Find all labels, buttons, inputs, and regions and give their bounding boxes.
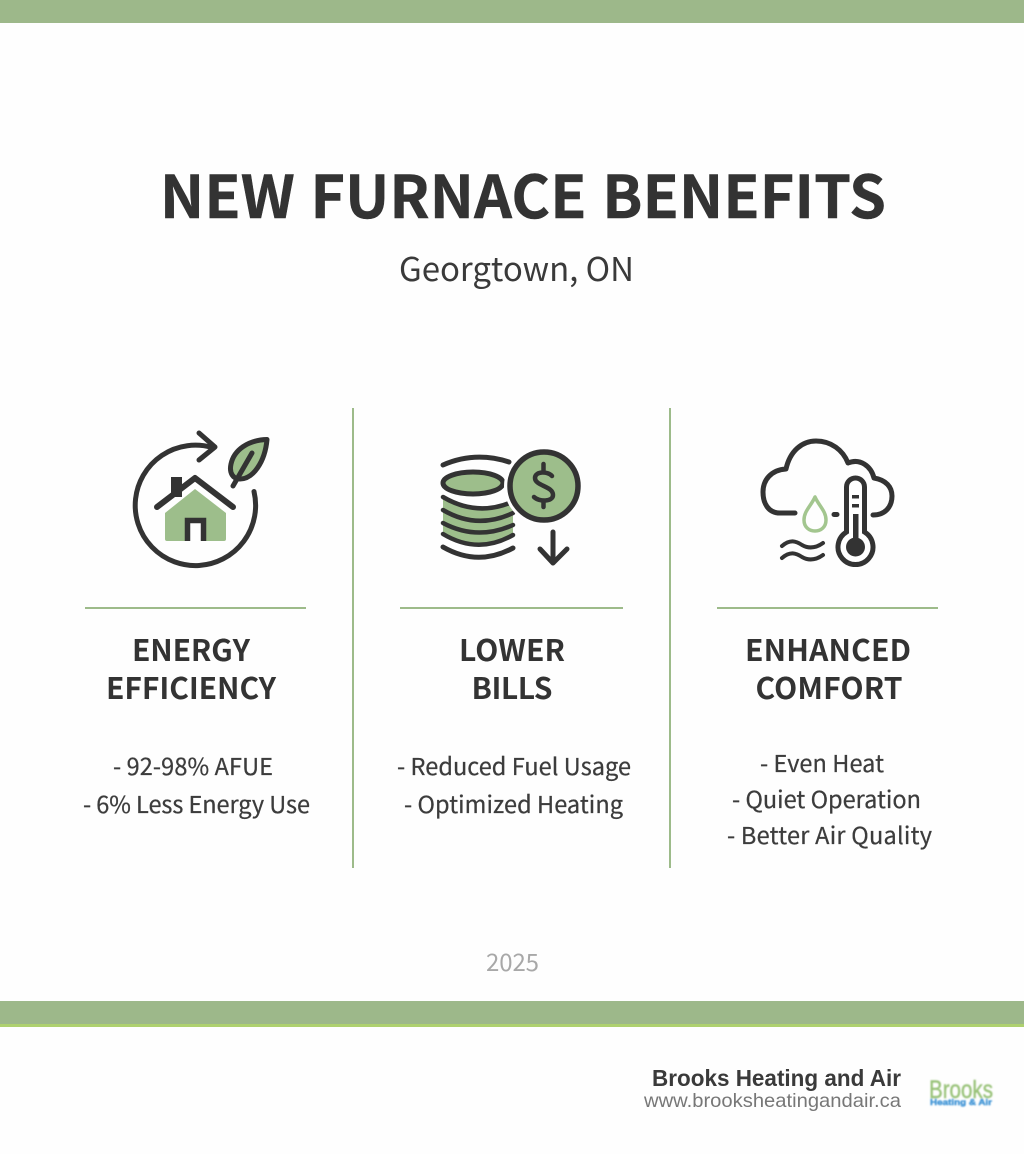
benefit list [727, 745, 932, 851]
website: www.brooksheatingandair.ca [643, 1090, 901, 1112]
benefit list [83, 748, 310, 820]
benefit list: - Better Air Quality [727, 817, 932, 851]
heading [459, 626, 565, 708]
divider [717, 607, 938, 609]
year: 2025 [486, 943, 539, 978]
heading: ENERGY [132, 626, 251, 670]
icon: house with arrow and leaf [135, 433, 267, 566]
icon: coins with dollar and down arrow [443, 447, 582, 563]
benefit list: - Even Heat [760, 745, 884, 779]
benefit list: - Reduced Fuel Usage [397, 748, 631, 782]
benefit list: - 92-98% AFUE [113, 748, 273, 782]
subtitle: Georgtown, ON [399, 243, 634, 291]
benefit list: - 6% Less Energy Use [83, 786, 310, 820]
benefit list: - Quiet Operation [732, 781, 921, 815]
heading: COMFORT [756, 664, 902, 708]
title: NEW FURNACE BENEFITS [160, 150, 886, 235]
heading: ENHANCED [745, 626, 911, 670]
bottom band [0, 1001, 1024, 1027]
top band [0, 0, 1024, 23]
heading [106, 626, 277, 708]
panel: enhanced comfort [717, 441, 938, 851]
divider [400, 607, 623, 609]
divider [85, 607, 306, 609]
panel: lower bills [397, 447, 631, 820]
benefit list: - Optimized Heating [404, 786, 623, 820]
panel: energy efficiency [83, 433, 310, 820]
heading [745, 626, 911, 708]
logo: Brooks [929, 1076, 993, 1104]
benefit list [397, 748, 631, 820]
logo: Heating & Air [930, 1098, 992, 1107]
icon: cloud, droplet and thermometer [763, 441, 892, 565]
heading: BILLS [472, 664, 552, 708]
company name: Brooks Heating and Air [652, 1065, 901, 1091]
heading: EFFICIENCY [106, 664, 277, 708]
heading: LOWER [459, 626, 565, 670]
